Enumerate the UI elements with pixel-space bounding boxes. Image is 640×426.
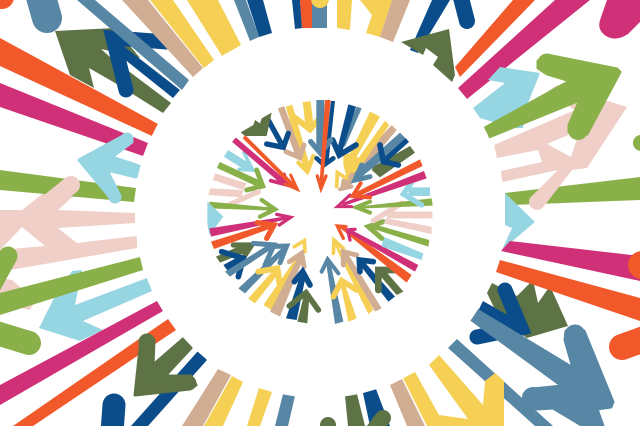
bar: yellow: [150, 0, 214, 68]
bar: tan lower: [390, 379, 425, 426]
arrow: olive top right: [401, 29, 455, 82]
arrow: green lower left: [0, 256, 143, 343]
arrow: steel large: [472, 310, 613, 426]
inner arrow: olive lower right: [377, 267, 403, 295]
inner arrow: tan lower: [270, 253, 304, 317]
inner arrow: yellow lower: [263, 241, 305, 310]
inner arrow: orange upper left: [244, 137, 297, 189]
inner arrow: steel narrow top: [342, 107, 362, 147]
inner arrow: yellow lower right second: [333, 240, 373, 314]
arrow: navy lower right: [477, 290, 525, 337]
arrow: navy top left: [113, 38, 180, 98]
inner arrow: green right lower: [368, 222, 429, 247]
bar: green right: [505, 177, 640, 205]
arrow: steel wing top left: [38, 0, 47, 18]
bar: yellow wide: [187, 0, 241, 56]
inner arrow: steel lower centre: [322, 259, 343, 324]
inner arrow: light blue right: [382, 237, 423, 260]
bar: orange lower left: [13, 319, 176, 426]
arrow: light blue lower left: [39, 270, 152, 341]
inner arrow: navy lower: [286, 272, 310, 320]
arrow: orange corner: [0, 0, 14, 9]
inner arrow: magenta upper right: [337, 171, 427, 207]
inner arrow: navy top right: [333, 104, 356, 155]
inner arrow: orange left: [211, 223, 274, 249]
arrow: olive top left: [55, 28, 171, 113]
inner arrow: olive lower: [289, 293, 318, 323]
bar: navy: [247, 0, 272, 37]
arrow: light blue right: [473, 67, 540, 128]
arrow: magenta wing: [599, 0, 640, 39]
inner arrow: pink right: [373, 203, 432, 234]
arrow: navy lower left: [112, 351, 207, 426]
arrow: olive lower: [320, 394, 383, 426]
inner arrow: light blue upper left: [226, 153, 253, 170]
inner arrow: navy lower right: [357, 260, 395, 302]
arrow: navy top right: [410, 0, 467, 53]
inner arrow: navy upper left: [266, 116, 288, 147]
bar: navy lower: [363, 389, 390, 426]
bar: magenta lower left: [0, 301, 163, 405]
bar: green left: [0, 170, 136, 202]
inner arrow: light blue triangle: [207, 202, 223, 235]
bar: yellow lower: [247, 388, 272, 426]
bar: magenta right: [501, 241, 640, 281]
inner arrow: pink left: [208, 173, 258, 207]
bar: tan: [122, 0, 203, 77]
arrow: orange wing: [622, 337, 640, 347]
bars: top centre: [292, 0, 329, 29]
inner arrow: navy top centre: [317, 101, 335, 165]
bar: orange right: [496, 260, 640, 321]
bar: orange top right: [455, 0, 535, 77]
bar: tan top right: [380, 0, 410, 42]
inner arrow: yellow upper right: [337, 112, 389, 187]
arrow: olive lower right: [487, 280, 568, 338]
bar: steel narrow: [234, 0, 259, 41]
inner arrow: yellow lower right: [333, 281, 357, 322]
arrow: light blue left: [79, 132, 139, 204]
bar: magenta top right: [458, 0, 590, 99]
arrow: pink left: [0, 177, 137, 310]
inner arrow: magenta left: [209, 214, 291, 237]
inner arrow: orange upper right: [353, 159, 423, 197]
inner arrow: navy lower left: [222, 252, 247, 277]
inner arrow: tan lower right: [342, 252, 382, 312]
inner arrow: olive upper right: [372, 146, 415, 177]
inner arrow: steel lower left second: [238, 246, 287, 293]
inner arrow: tan upper right: [340, 125, 397, 190]
inner arrow: magenta right: [347, 228, 418, 272]
inner arrow: yellow top: [289, 106, 313, 172]
bar: steel lower: [275, 394, 295, 426]
inner arrow: green right: [356, 198, 433, 213]
bar: steel long: [448, 339, 553, 426]
inner arrow: navy upper right: [380, 140, 407, 165]
inner ring of arrows: [207, 100, 433, 324]
bar: steel: [77, 0, 189, 90]
bars: yellow and tan: [182, 369, 243, 426]
inner arrow: olive upper left: [241, 113, 272, 136]
inner arrow: steel top centre: [311, 100, 331, 153]
inner arrow: orange right: [337, 225, 412, 283]
arrow: light blue triangle: [502, 193, 535, 250]
inner arrow: steel upper right: [354, 133, 407, 180]
arrow: green right: [485, 54, 620, 140]
bars: yellow top: [337, 0, 392, 37]
inner arrow: green left: [209, 200, 275, 217]
inner arrow: yellow top wide: [293, 102, 323, 130]
inner arrow: green upper left: [218, 165, 263, 190]
arrow: green circle edge: [633, 135, 640, 151]
arrow: pink right: [494, 85, 627, 210]
bar: orange left: [0, 38, 158, 136]
arrow: orange blob right: [628, 251, 640, 279]
inner arrow: light blue upper right: [403, 177, 430, 205]
inner arrow: tan top: [281, 107, 304, 158]
inner arrow: orange top centre: [317, 100, 331, 188]
inner arrow: olive lower left: [216, 245, 252, 263]
arrow: olive lower left: [135, 334, 196, 395]
inner arrow: yellow lower left: [248, 268, 280, 303]
white centre circle: [135, 28, 505, 398]
inner arrow: magenta upper left: [234, 140, 287, 185]
arrow: pink wing upper: [30, 185, 71, 218]
inner arrow: steel lower left: [225, 243, 275, 277]
arrow: yellow lower: [403, 355, 504, 426]
bar: magenta left: [0, 83, 148, 156]
